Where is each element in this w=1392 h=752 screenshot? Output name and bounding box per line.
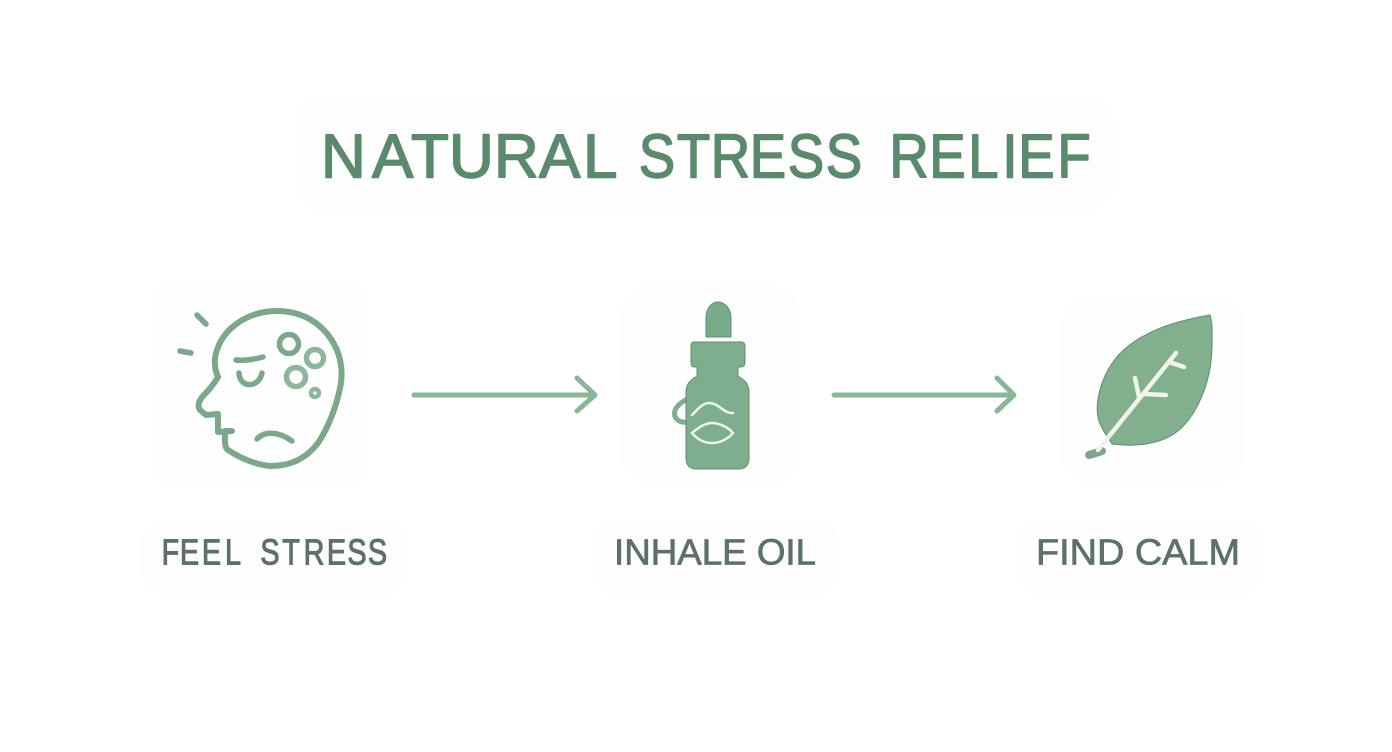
leaf veins: [1098, 353, 1184, 450]
label: inhale oil: INHALE OIL: [614, 532, 816, 572]
breath and lips marks: [692, 403, 733, 443]
stress marks: [180, 315, 206, 353]
title: RELIEF: [889, 122, 1091, 191]
arrow: oil to calm: [834, 378, 1014, 411]
head outline: [199, 311, 342, 466]
label: feel stress: FEEL STRESS: [162, 531, 387, 572]
stress circles: [280, 334, 298, 354]
leaf blade: [1097, 315, 1212, 445]
title: NATURAL: [321, 122, 617, 192]
arrow: stress to oil: [414, 378, 595, 411]
frown mouth: [257, 433, 292, 441]
dropper bulb: [706, 302, 731, 337]
icon: leaf: [1089, 315, 1212, 455]
title: [321, 122, 1091, 192]
icon: stressed head: [180, 311, 342, 466]
title: STRESS: [639, 122, 862, 191]
brow and closed eye: [236, 357, 263, 385]
bottle handle: [674, 399, 687, 422]
label: find calm: FIND CALM: [1036, 532, 1240, 572]
leaf stem tip: [1089, 451, 1102, 455]
icon: dropper bottle: [674, 302, 749, 469]
bottle body and collar: [686, 342, 749, 469]
